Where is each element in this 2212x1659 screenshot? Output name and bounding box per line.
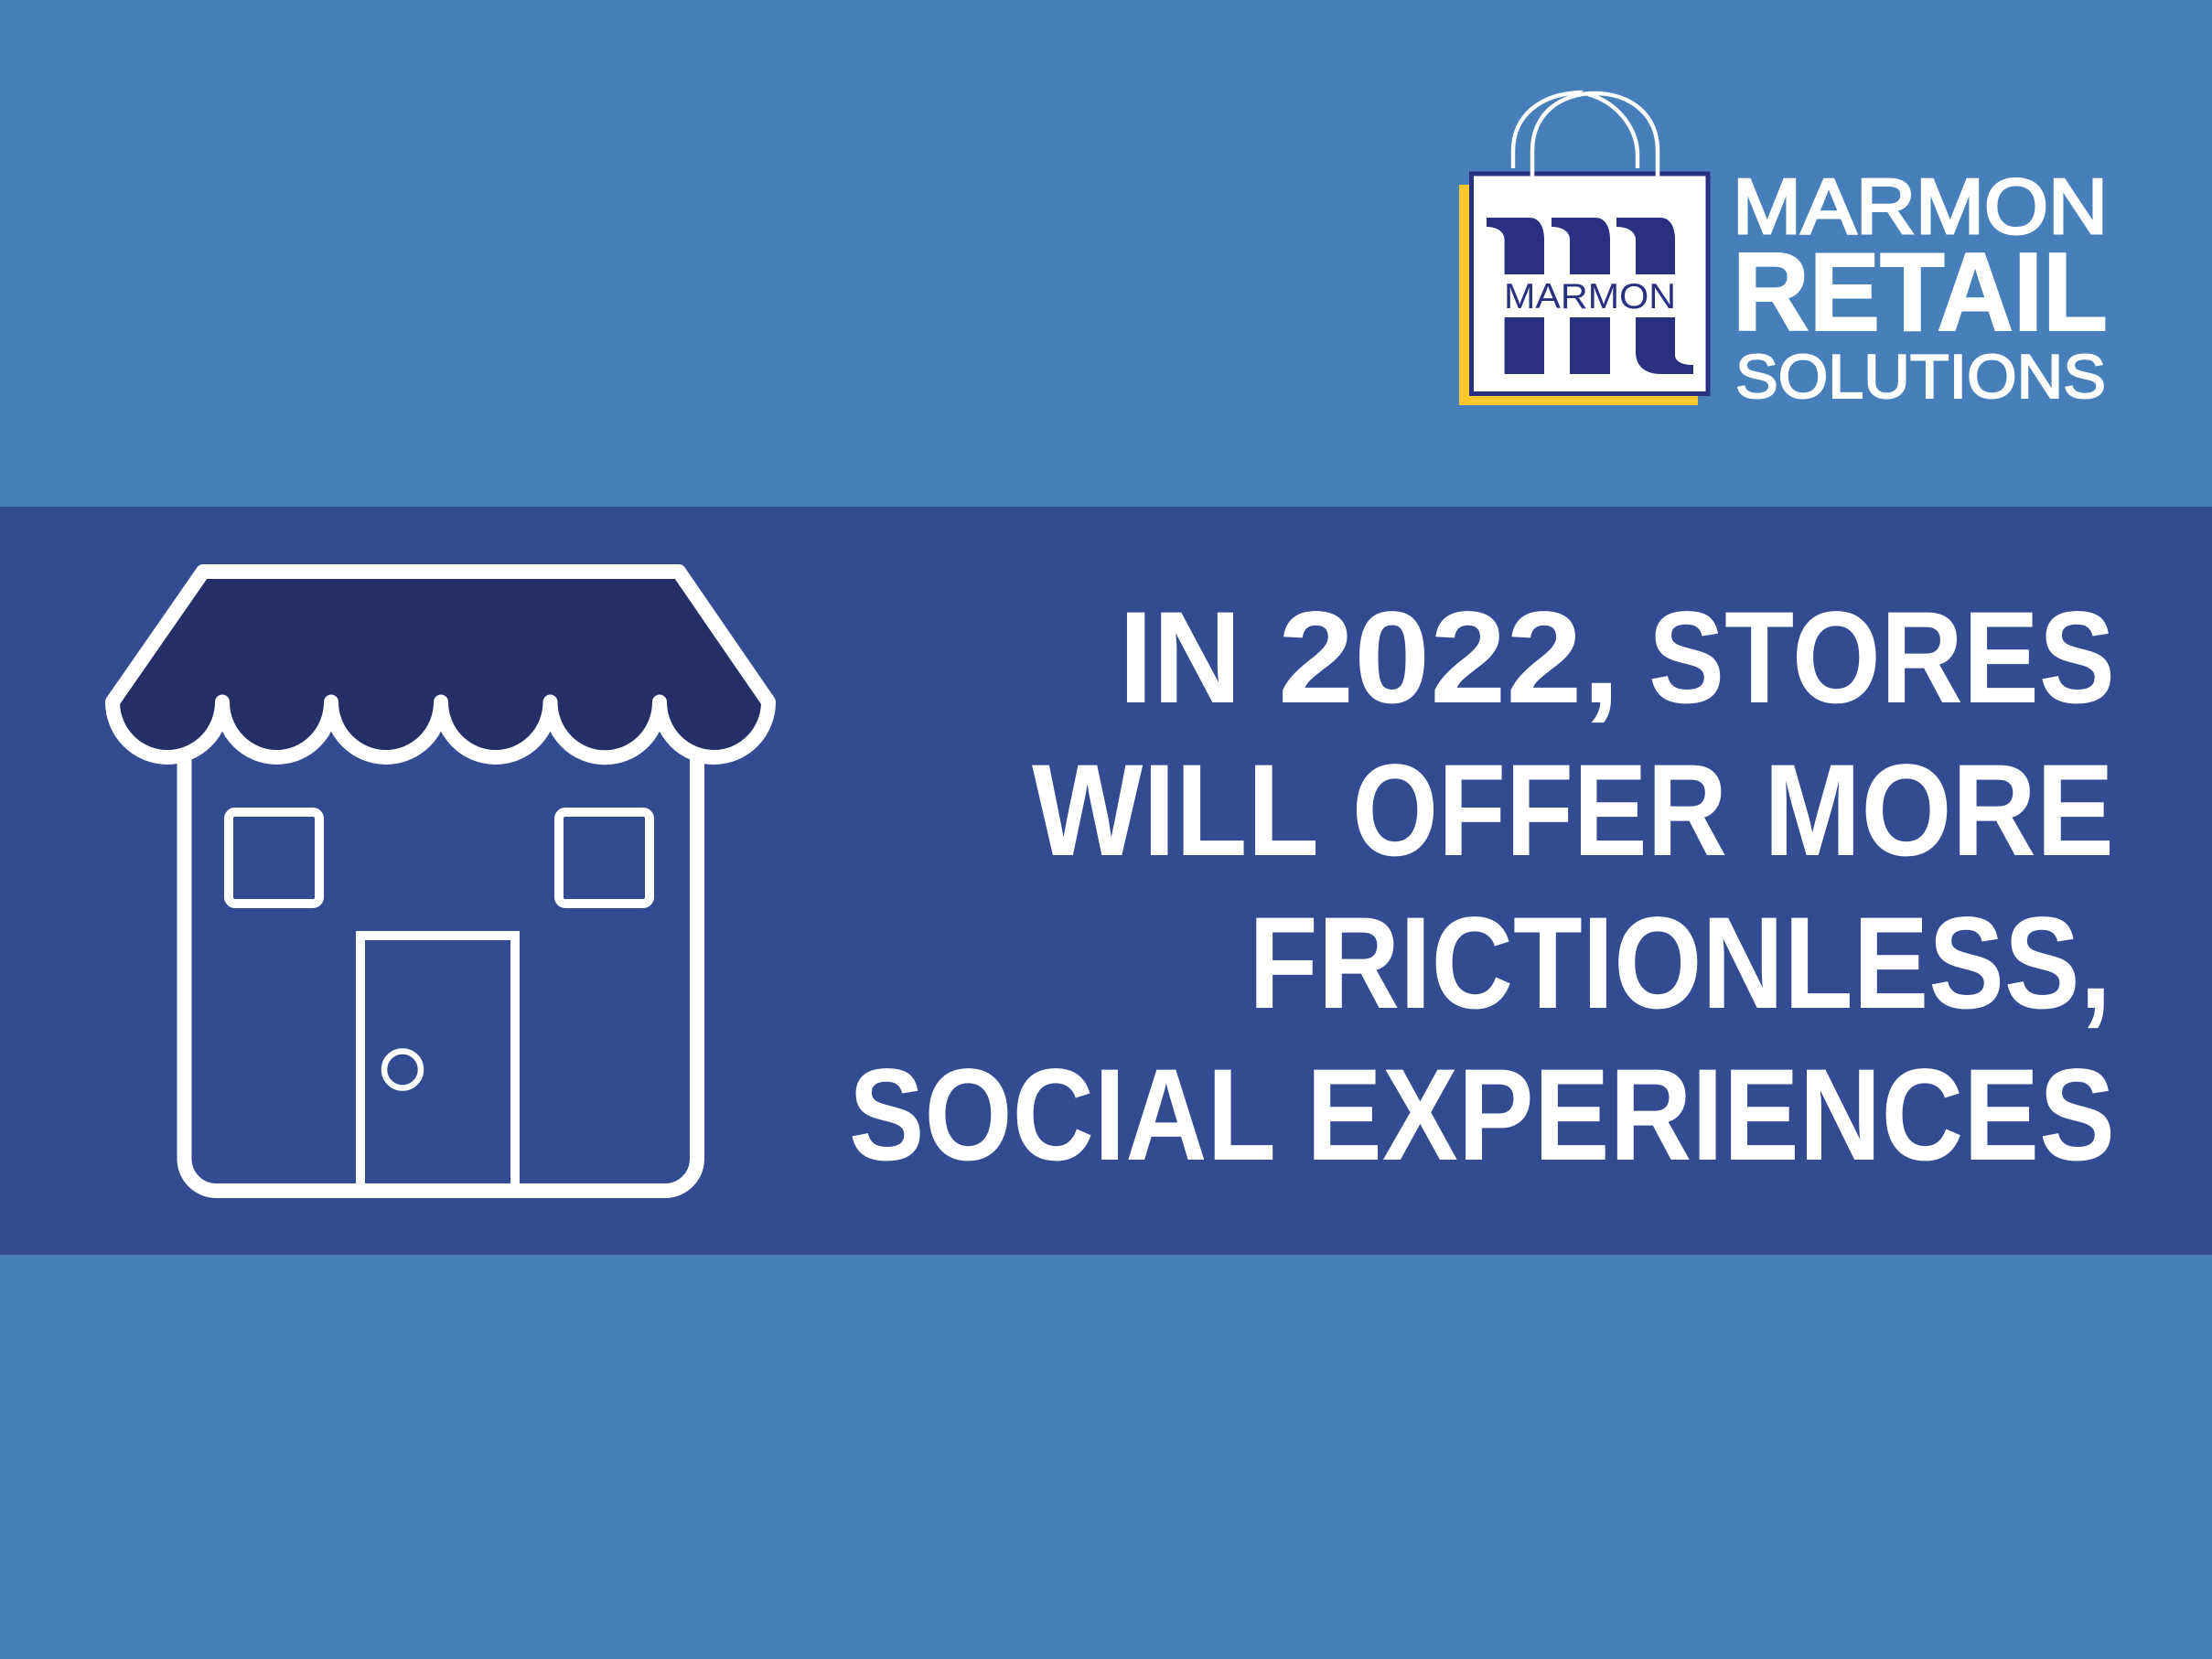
left window: [229, 812, 319, 904]
bag label: MARMON: [1504, 277, 1676, 316]
right window: [559, 812, 650, 904]
door knob: [384, 1052, 421, 1088]
headline: STORES: [1648, 585, 2115, 731]
headline: MORE: [1764, 738, 2114, 883]
store walls: [185, 752, 697, 1191]
headline: EXPERIENCES: [1306, 1043, 2115, 1188]
icon: storefront: [113, 572, 768, 1191]
headline: IN: [1119, 585, 1241, 731]
panel: central band: [0, 507, 2212, 1255]
door: [360, 936, 515, 1191]
headline: 2022,: [1278, 585, 1620, 731]
headline: WILL: [1032, 738, 1319, 883]
logo wordmark: MARMON: [1733, 164, 2108, 251]
headline: [849, 585, 2115, 1188]
logo wordmark: SOLUTIONS: [1735, 342, 2106, 412]
logo wordmark: [1733, 164, 2108, 412]
headline: OFFER: [1352, 738, 1727, 883]
logo wordmark: RETAIL: [1733, 230, 2108, 354]
icon: shopping bag: [1459, 92, 1708, 405]
logo: Marmon Retail Solutions: [1459, 92, 2108, 412]
headline: SOCIAL: [849, 1043, 1276, 1188]
awning: [113, 572, 768, 757]
